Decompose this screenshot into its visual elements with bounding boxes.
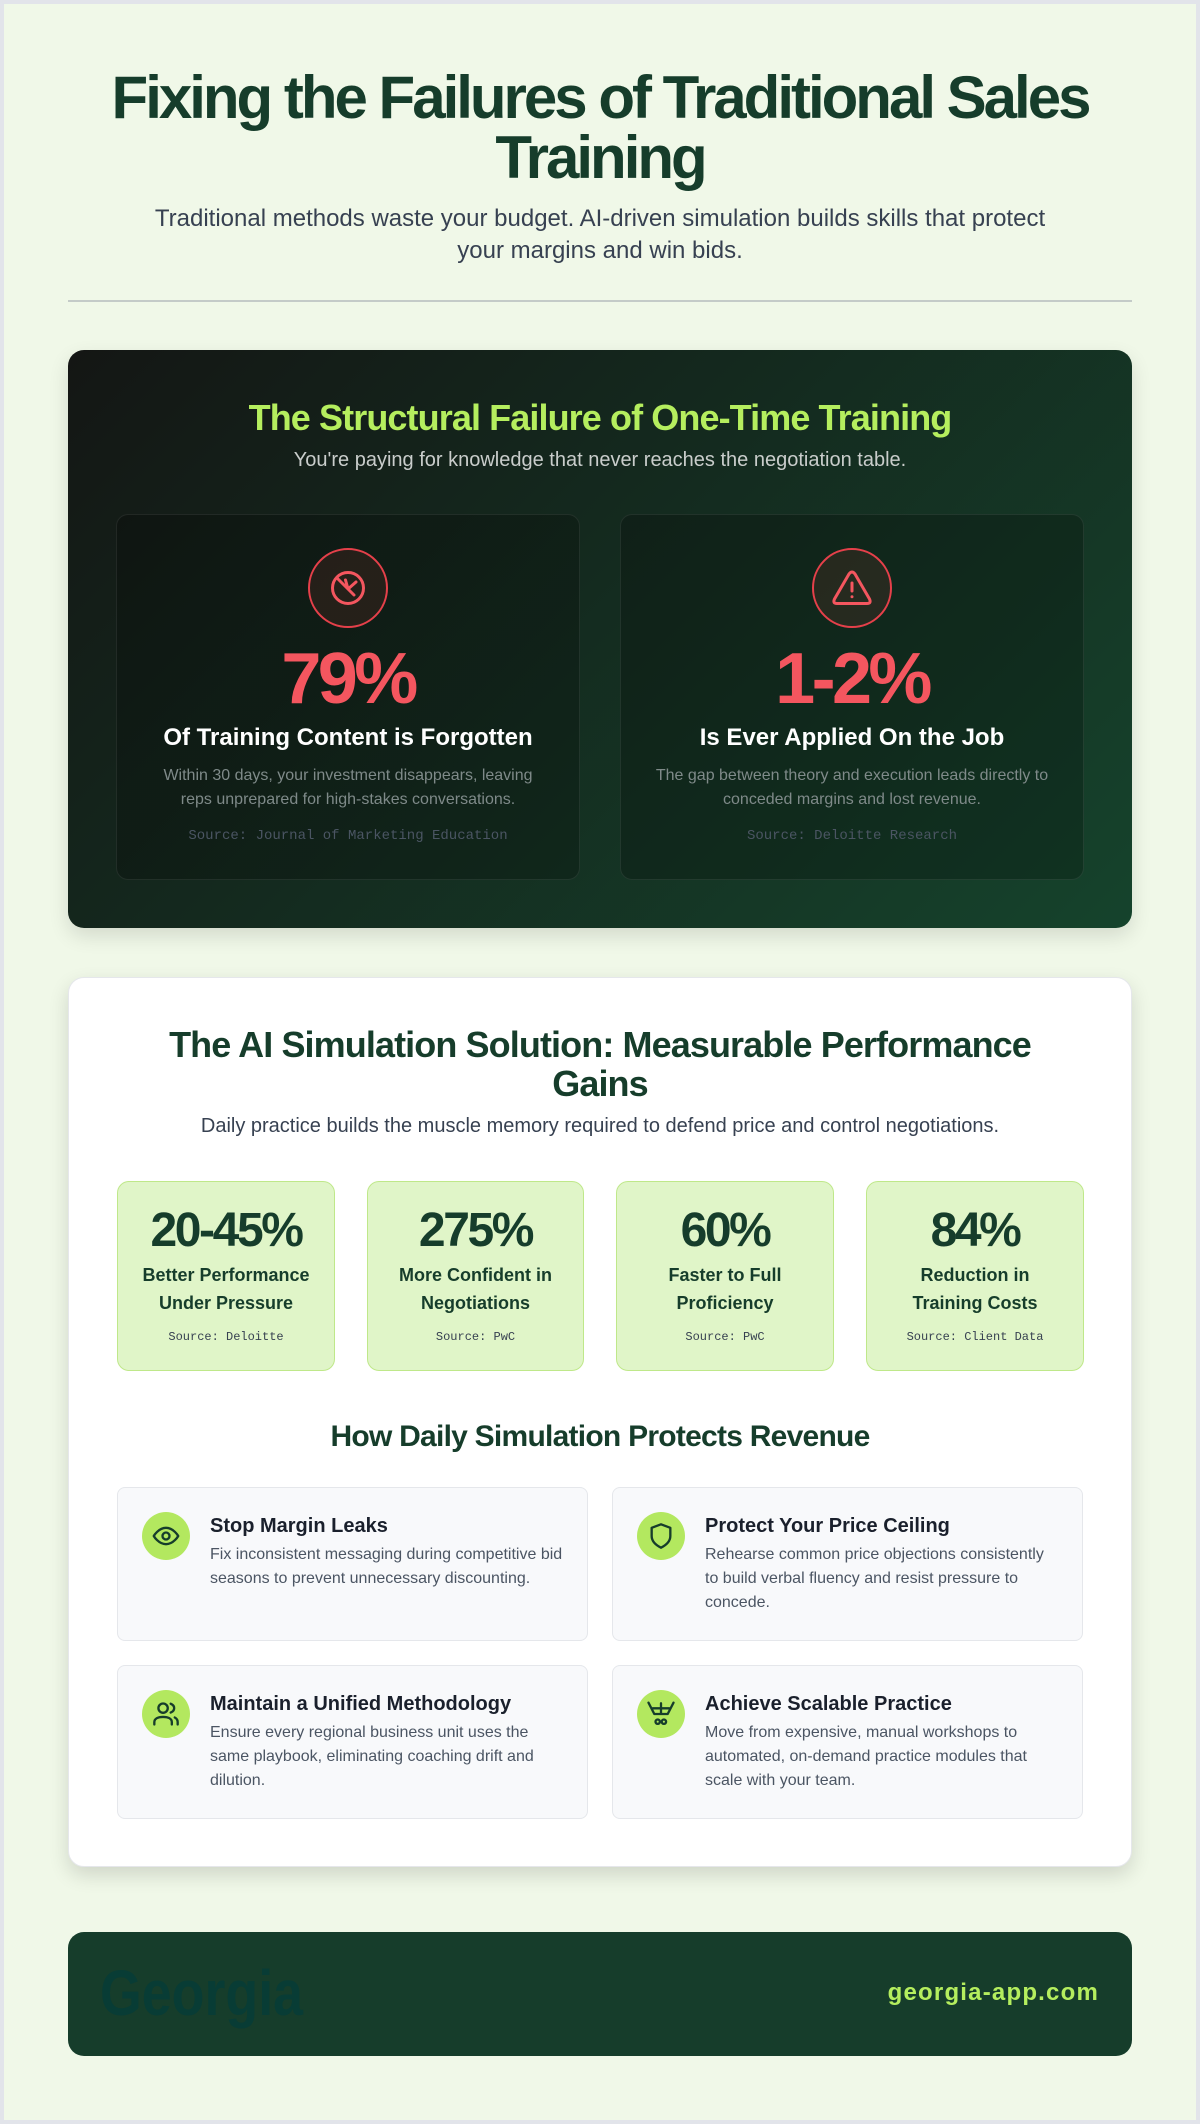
feature text: dilution. [210, 1772, 265, 1789]
icon: shield [637, 1512, 685, 1560]
card description [656, 767, 1048, 808]
number: 84% [931, 1204, 1019, 1257]
label: Proficiency [676, 1293, 774, 1313]
label: Negotiations [421, 1293, 530, 1313]
stat 1-2%: 1-2% [775, 639, 929, 719]
source: Source: PwC [436, 1330, 515, 1344]
header [68, 64, 1132, 302]
subheading: How Daily Simulation Protects Revenue [330, 1420, 870, 1453]
source: Source: Deloitte [168, 1330, 284, 1344]
label [399, 1265, 552, 1313]
source: Source: PwC [685, 1330, 765, 1344]
solution subtitle: Daily practice builds the muscle memory required to defend price and control negotiations. [201, 1115, 999, 1137]
stat card: proficiency [616, 1181, 834, 1371]
label: Under Pressure [159, 1293, 293, 1313]
feature title: Stop Margin Leaks [210, 1515, 388, 1537]
feature text: Ensure every regional business unit uses the [210, 1724, 528, 1741]
icon: eye [142, 1512, 190, 1560]
card: applied [620, 514, 1084, 880]
label: Better Performance [142, 1265, 310, 1285]
feature text [705, 1546, 1044, 1611]
solution heading [169, 1024, 1031, 1104]
card title: Of Training Content is Forgotten [163, 724, 533, 751]
feature text [210, 1546, 562, 1587]
title: Fixing the Failures of Traditional Sales [112, 64, 1088, 131]
feature text: scale with your team. [705, 1772, 855, 1789]
stat 79%: 79% [281, 639, 415, 719]
feature text: to build verbal fluency and resist pressure to [705, 1570, 1018, 1587]
feature text: Fix inconsistent messaging during competitive bid [210, 1546, 562, 1563]
panel: AI simulation solution [68, 977, 1132, 1867]
label: More Confident in [399, 1265, 552, 1285]
panel heading: The Structural Failure of One-Time Training [249, 397, 951, 438]
footer URL: georgia-app.com [888, 1979, 1099, 2006]
card: forgotten [116, 514, 580, 880]
panel: structural failure [68, 350, 1132, 928]
subtitle: your margins and win bids. [457, 237, 743, 264]
icon: gauge [308, 548, 388, 628]
card description: Within 30 days, your investment disappears, leaving [163, 767, 533, 784]
feature card: price ceiling [612, 1487, 1083, 1641]
feature text [705, 1724, 1027, 1789]
number: 275% [419, 1204, 532, 1257]
source: Source: Client Data [907, 1330, 1043, 1344]
panel subtitle: You're paying for knowledge that never reaches the negotiation table. [294, 449, 906, 471]
card source: Source: Journal of Marketing Education [188, 828, 508, 844]
solution heading: The AI Simulation Solution: Measurable Performance [169, 1024, 1031, 1065]
card description: The gap between theory and execution leads directly to [656, 767, 1048, 784]
icon: users [142, 1690, 190, 1738]
label [912, 1265, 1038, 1313]
subtitle [155, 205, 1045, 264]
feature card: unified methodology [117, 1665, 588, 1819]
label: Reduction in [920, 1265, 1030, 1285]
feature text: automated, on-demand practice modules that [705, 1748, 1027, 1765]
label: Faster to Full [668, 1265, 782, 1285]
feature card: margin leaks [117, 1487, 588, 1641]
feature text: concede. [705, 1594, 770, 1611]
feature text: seasons to prevent unnecessary discounting. [210, 1570, 530, 1587]
footer [68, 1932, 1132, 2056]
card description [163, 767, 533, 808]
icon: cart [637, 1690, 685, 1738]
card title: Is Ever Applied On the Job [700, 724, 1004, 751]
icon: warning triangle [812, 548, 892, 628]
label [142, 1265, 310, 1313]
solution heading: Gains [552, 1063, 648, 1104]
feature text: same playbook, eliminating coaching drift and [210, 1748, 534, 1765]
card source: Source: Deloitte Research [747, 828, 957, 844]
card description: conceded margins and lost revenue. [723, 791, 981, 808]
feature title: Protect Your Price Ceiling [705, 1515, 950, 1537]
feature text [210, 1724, 534, 1789]
feature title: Maintain a Unified Methodology [210, 1693, 511, 1715]
number: 60% [681, 1204, 769, 1257]
title [112, 64, 1089, 191]
number: 20-45% [150, 1204, 302, 1257]
feature card: scalable practice [612, 1665, 1083, 1819]
title: Training [495, 124, 705, 191]
label [668, 1265, 782, 1313]
feature text: Move from expensive, manual workshops to [705, 1724, 1017, 1741]
feature text: Rehearse common price objections consistently [705, 1546, 1044, 1563]
label: Training Costs [912, 1293, 1038, 1313]
stat card: costs [866, 1181, 1084, 1371]
stat card: confidence [367, 1181, 584, 1371]
header divider [68, 300, 1132, 302]
subtitle: Traditional methods waste your budget. AI-driven simulation builds skills that protect [155, 205, 1045, 232]
stat card: performance [117, 1181, 335, 1371]
card description: reps unprepared for high-stakes conversations. [181, 791, 515, 808]
feature title: Achieve Scalable Practice [705, 1693, 952, 1715]
